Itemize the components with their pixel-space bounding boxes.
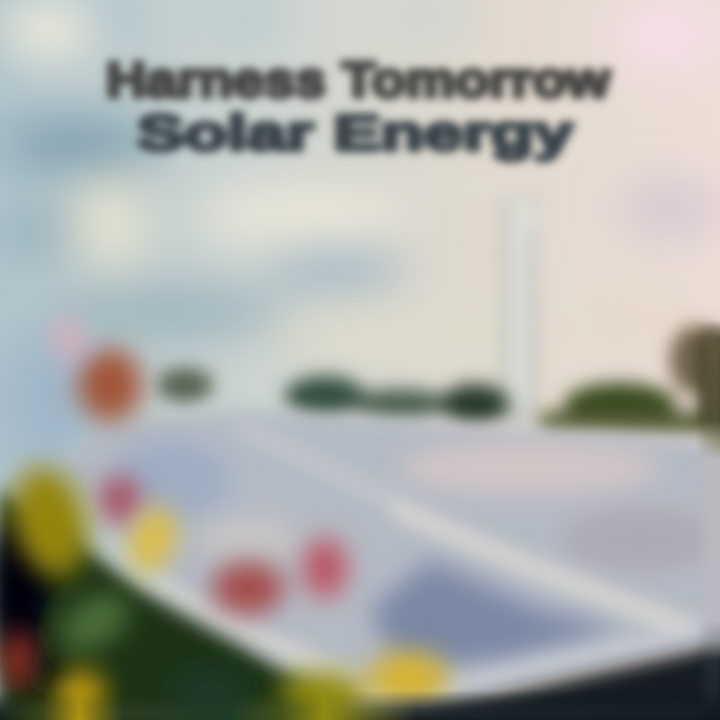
tree line — [157, 326, 720, 434]
flowers: red — [0, 318, 347, 690]
flowers: yellow — [1, 459, 448, 720]
foreground foliage — [0, 490, 345, 720]
title: Solar Energy — [137, 105, 573, 161]
title: Harness Tomorrow — [106, 52, 610, 108]
wind turbine — [430, 180, 590, 420]
right edge colour strip — [695, 320, 720, 720]
bottom edge colour strip — [0, 690, 720, 720]
solar panels — [60, 410, 720, 700]
dark panel frame — [390, 645, 720, 720]
title — [106, 52, 610, 161]
